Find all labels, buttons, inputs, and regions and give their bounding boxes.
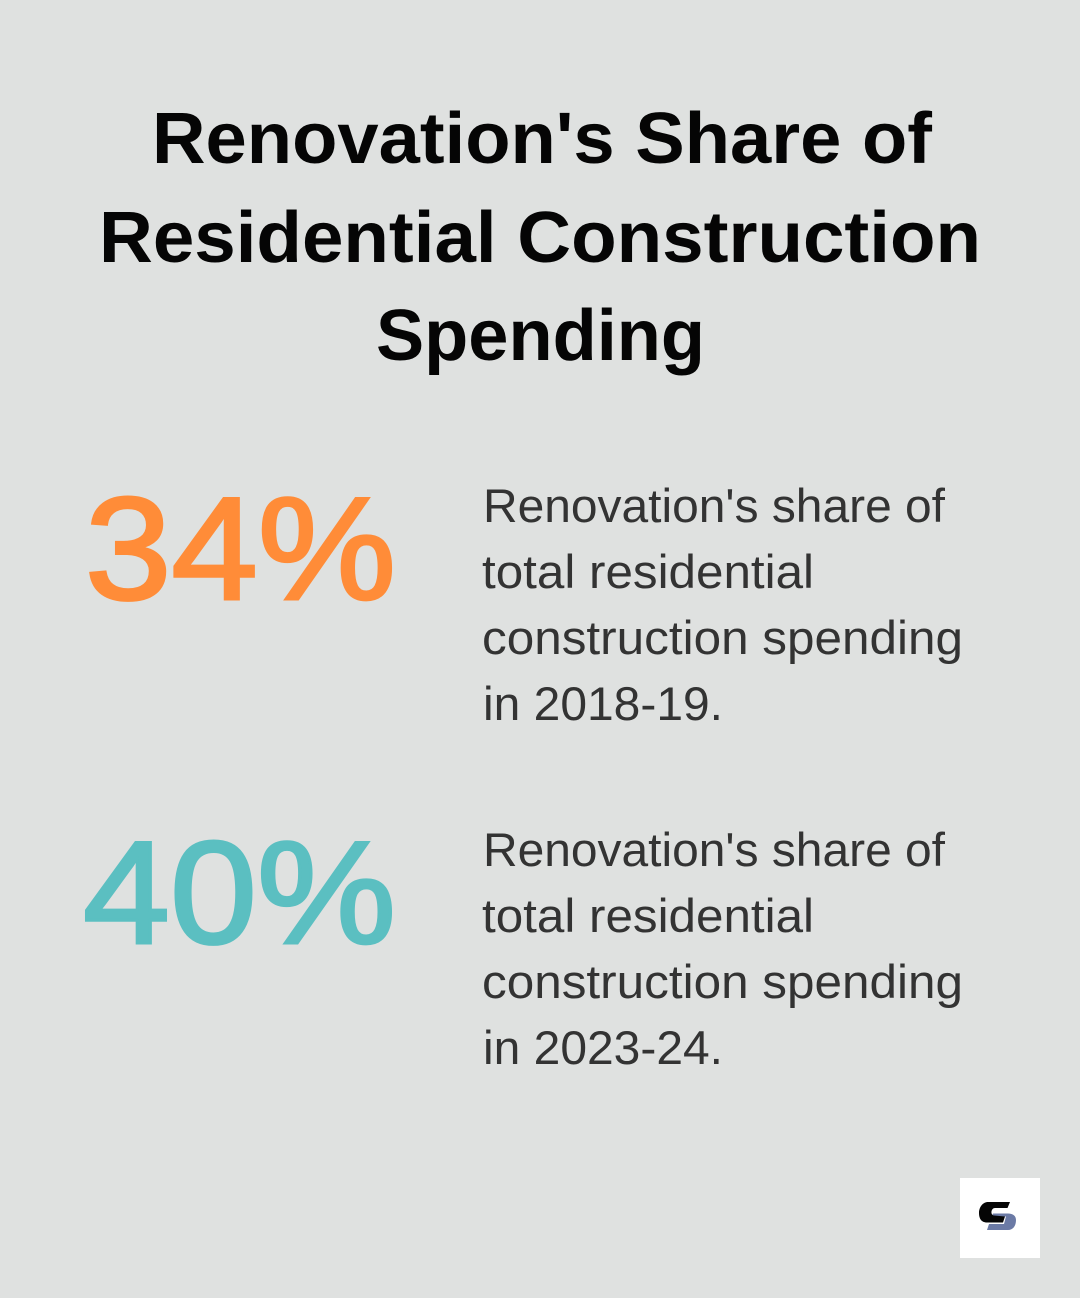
title: Spending xyxy=(376,296,705,376)
description: 2023-24: in 2023-24. xyxy=(483,1021,723,1074)
description: 2023-24: construction spending xyxy=(482,955,963,1008)
description: 2018-19: in 2018-19. xyxy=(483,677,723,730)
description: 2018-19: Renovation's share of xyxy=(483,479,946,532)
description: 2018-19: total residential xyxy=(482,545,814,598)
logo badge xyxy=(960,1178,1040,1258)
title: Residential Construction xyxy=(99,198,981,278)
icon: logo blue lower S xyxy=(987,1214,1016,1230)
description: 2018-19: construction spending xyxy=(482,611,963,664)
icon: logo black upper S xyxy=(979,1202,1010,1222)
description: 2023-24 xyxy=(482,823,963,1074)
statistic: 40%: 40% xyxy=(83,811,396,974)
description: 2018-19 xyxy=(482,479,963,730)
description: 2023-24: total residential xyxy=(482,889,814,942)
statistic: 34%: 34% xyxy=(85,467,396,630)
title xyxy=(99,99,981,376)
title: Renovation's Share of xyxy=(152,99,933,179)
description: 2023-24: Renovation's share of xyxy=(483,823,946,876)
